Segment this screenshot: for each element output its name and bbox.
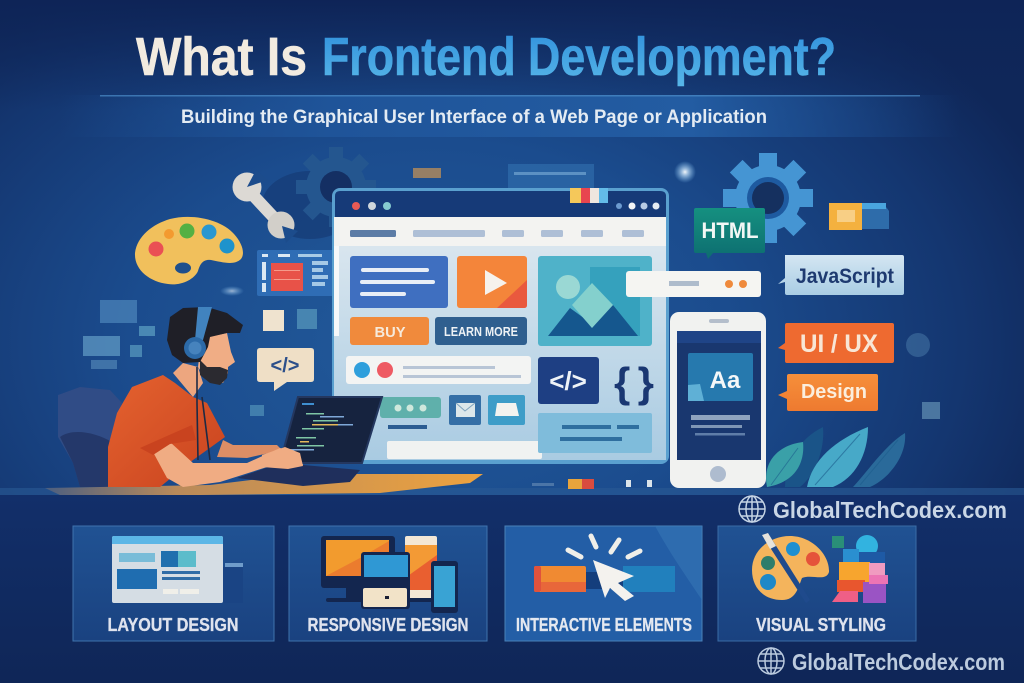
- sleeve: [140, 425, 196, 455]
- icon: paint palette: [135, 217, 243, 284]
- shirt: [108, 375, 225, 487]
- icon: wrench: [232, 170, 298, 243]
- panel: responsive design: RESPONSIVE DESIGN: [308, 615, 468, 635]
- hand: [262, 447, 303, 469]
- Design tag: [778, 374, 878, 411]
- buy button: [350, 317, 429, 345]
- far forearm: [217, 440, 282, 458]
- video card: [457, 256, 527, 308]
- earphone cable: [197, 367, 210, 460]
- UI/UX tag: [778, 323, 894, 363]
- Aa card: [688, 353, 753, 401]
- panel: visual styling: VISUAL STYLING: [756, 615, 886, 635]
- gear icon: [723, 153, 813, 243]
- info panel: [538, 413, 652, 453]
- UI/UX tag: UI / UX: [800, 330, 878, 358]
- white floating bar: [626, 271, 761, 297]
- panel: visual styling: [718, 526, 916, 641]
- browser window: [332, 188, 669, 464]
- JavaScript tag: [778, 255, 904, 295]
- headset band: [195, 307, 212, 340]
- icon: cursor click: [534, 536, 675, 601]
- subtitle banner: [60, 95, 960, 137]
- title: Frontend Development?: [322, 27, 836, 87]
- list row: [346, 356, 531, 384]
- text card: [350, 256, 448, 308]
- code tile: </>: [549, 366, 587, 396]
- face: [198, 333, 235, 383]
- code speech bubble: [257, 348, 314, 391]
- chat pill: [380, 397, 441, 418]
- curly braces: { }: [614, 359, 654, 406]
- icon: layout widget: [257, 250, 337, 296]
- title: What Is: [136, 27, 307, 87]
- navigation bar: [334, 217, 666, 246]
- small desk marks: [532, 479, 652, 489]
- panel: layout design: LAYOUT DESIGN: [108, 615, 238, 635]
- floating card top right: [829, 203, 889, 230]
- panel: interactive elements: [505, 526, 702, 641]
- icon: layout window: [112, 536, 243, 603]
- headset ear cup: [184, 337, 206, 359]
- code tile: [538, 357, 599, 404]
- Design tag: Design: [801, 381, 867, 403]
- laptop: [237, 397, 382, 486]
- image card: [538, 256, 652, 346]
- subtitle banner: Building the Graphical User Interface of a Web Page or Application: [181, 107, 767, 128]
- buy button: BUY: [374, 324, 406, 341]
- smartphone: [670, 312, 766, 488]
- learn more button: [435, 317, 527, 345]
- code speech bubble: </>: [271, 355, 299, 377]
- developer figure: [108, 307, 303, 487]
- Aa card: Aa: [710, 367, 741, 394]
- near arm: [153, 442, 303, 487]
- leaves: [766, 427, 905, 487]
- icon: palette and blocks: [752, 533, 888, 603]
- HTML tag: [694, 208, 765, 259]
- watermark top: GlobalTechCodex.com: [773, 497, 1007, 523]
- JavaScript tag: JavaScript: [796, 265, 894, 288]
- beard: [200, 360, 228, 385]
- desk: [45, 474, 483, 495]
- icon: responsive devices: [321, 536, 458, 613]
- panel: interactive elements: INTERACTIVE ELEMENTS: [516, 615, 692, 635]
- colour tabs: [570, 188, 608, 203]
- panel: responsive design: [289, 526, 487, 641]
- learn more button: LEARN MORE: [444, 324, 518, 339]
- HTML tag: HTML: [702, 218, 758, 243]
- hair: [167, 307, 243, 363]
- decorative gears and floating shapes: [83, 147, 940, 419]
- floating cream square: [263, 310, 284, 331]
- title: [136, 27, 836, 87]
- mail tile: [449, 395, 481, 425]
- shape tile: [488, 395, 525, 425]
- panel: layout design: [73, 526, 274, 641]
- chair: [58, 387, 122, 487]
- window controls: [352, 202, 660, 210]
- neck: [173, 363, 203, 397]
